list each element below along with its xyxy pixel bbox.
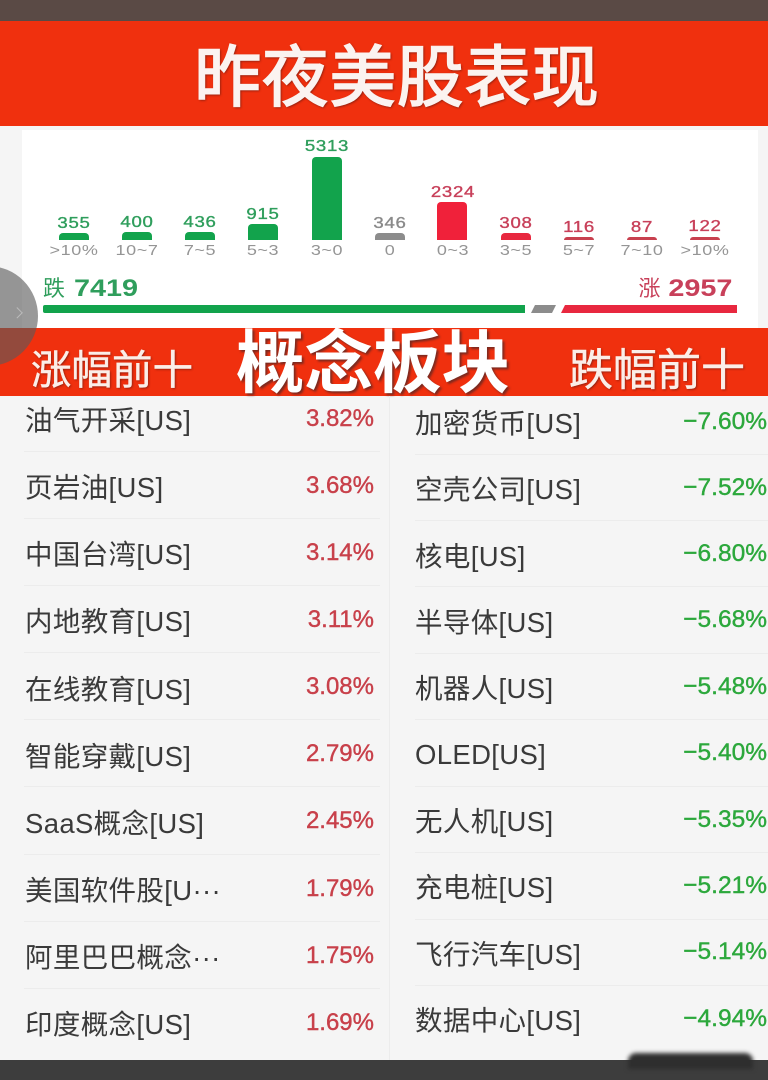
value labels: 5313 <box>305 138 349 155</box>
panel: gainers list: 3.68% <box>306 472 374 499</box>
value labels: 400 <box>120 214 154 231</box>
falling total: 7419 <box>74 275 138 302</box>
grey share bar <box>531 305 556 313</box>
title: 昨夜美股表现 <box>194 41 599 116</box>
panel: losers list: 加密货币[US] <box>415 408 581 439</box>
panel: gainers list: 页岩油[US] <box>25 472 163 503</box>
range labels: 3~5 <box>500 242 532 259</box>
heading: top gainers: 涨幅前十 <box>31 347 193 393</box>
value labels: 87 <box>631 219 653 236</box>
range labels: >10% <box>681 242 729 259</box>
rising total: 涨 <box>638 276 660 301</box>
range labels: >10% <box>50 242 98 259</box>
panel: gainers list: 2.79% <box>306 740 374 767</box>
panel: losers list: OLED[US] <box>415 739 546 770</box>
range labels: 7~5 <box>184 242 216 259</box>
top dark band <box>0 0 768 21</box>
panel: losers list <box>389 396 768 1060</box>
panel: gainers list: 2.45% <box>306 807 374 834</box>
panel: losers list: −5.35% <box>683 806 767 833</box>
panel: gainers list: 3.14% <box>306 539 374 566</box>
range labels: 0~3 <box>437 242 469 259</box>
panel: gainers list: 内地教育[US] <box>25 606 191 637</box>
range labels: 3~0 <box>311 242 343 259</box>
value labels: 122 <box>688 218 722 235</box>
panel: gainers list: 油气开采[US] <box>25 405 191 436</box>
panel: losers list: −7.60% <box>683 408 767 435</box>
concept banner <box>0 328 768 396</box>
bar chart <box>57 138 722 240</box>
panel: gainers list: 1.69% <box>306 1009 374 1036</box>
panel: gainers list: 3.82% <box>306 405 374 432</box>
panel: losers list: −5.14% <box>683 938 767 965</box>
title banner <box>0 21 768 126</box>
falling total <box>43 275 138 302</box>
value labels: 915 <box>246 206 280 223</box>
bars <box>59 157 720 240</box>
green share bar <box>43 305 525 313</box>
panel: losers list: 充电桩[US] <box>415 872 553 903</box>
panel: losers list: 空壳公司[US] <box>415 474 581 505</box>
range labels <box>50 242 729 259</box>
panel: gainers list: 智能穿戴[US] <box>25 741 191 772</box>
panel: losers list: 机器人[US] <box>415 673 553 704</box>
side handle button <box>0 266 38 366</box>
panel: losers list: 数据中心[US] <box>415 1005 581 1036</box>
panel: losers list: −5.68% <box>683 606 767 633</box>
panel: gainers list: 阿里巴巴概念··· <box>25 942 221 973</box>
panel: losers list: −6.80% <box>683 540 767 567</box>
value labels: 308 <box>499 215 533 232</box>
panel: gainers list: 中国台湾[US] <box>25 539 191 570</box>
panel: losers list: −4.94% <box>683 1005 767 1032</box>
panel: gainers list <box>24 405 380 1040</box>
icon: chevron <box>12 307 23 318</box>
panel: losers list: 无人机[US] <box>415 806 553 837</box>
heading: concept sectors: 概念板块 <box>236 325 510 402</box>
panel: losers list: −7.52% <box>683 474 767 501</box>
rising total <box>638 275 732 302</box>
falling total: 跌 <box>43 276 65 301</box>
value labels <box>57 138 722 236</box>
panel: gainers list: SaaS概念[US] <box>25 808 204 839</box>
panel: losers list: 飞行汽车[US] <box>415 939 581 970</box>
range labels: 10~7 <box>116 242 158 259</box>
panel: gainers list: 美国软件股[U··· <box>25 875 221 906</box>
panel: gainers list: 印度概念[US] <box>25 1009 191 1040</box>
panel: gainers list: 在线教育[US] <box>25 674 191 705</box>
value labels: 116 <box>563 219 595 236</box>
watermark smudge <box>628 1053 753 1069</box>
panel: market distribution chart <box>22 130 758 328</box>
panel: gainers list: 1.75% <box>306 942 374 969</box>
bottom dark band <box>0 1060 768 1080</box>
value labels: 436 <box>183 214 217 231</box>
panel: losers list: −5.48% <box>683 673 767 700</box>
value labels: 355 <box>57 215 91 232</box>
red share bar <box>561 305 737 313</box>
panel: gainers list: 3.11% <box>308 606 374 633</box>
range labels: 5~3 <box>247 242 279 259</box>
panel: losers list: −5.21% <box>683 872 767 899</box>
panel: losers list: 核电[US] <box>415 541 526 572</box>
panel: gainers list: 1.79% <box>306 875 374 902</box>
value labels: 2324 <box>431 184 475 201</box>
panel: losers list: 半导体[US] <box>415 607 553 638</box>
rising total: 2957 <box>668 275 732 302</box>
heading: top losers: 跌幅前十 <box>569 346 745 395</box>
value labels: 346 <box>373 215 407 232</box>
panel: gainers list: 3.08% <box>306 673 374 700</box>
range labels: 0 <box>385 242 395 259</box>
range labels: 5~7 <box>563 242 595 259</box>
range labels: 7~10 <box>621 242 663 259</box>
panel: losers list: −5.40% <box>683 739 767 766</box>
